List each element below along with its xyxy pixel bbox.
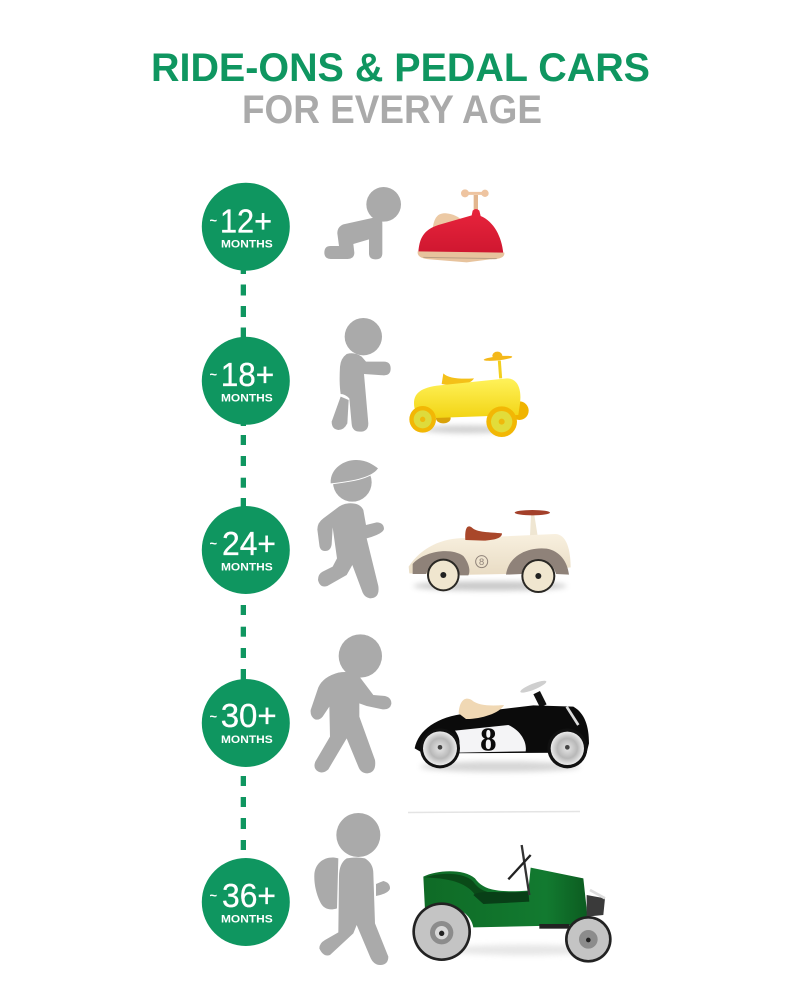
icon: child with backpack: [314, 813, 390, 965]
badge: 18+ months: ~: [210, 367, 218, 382]
badge: 30+ months: ~: [210, 709, 218, 724]
badge: 12+ months: [202, 183, 290, 271]
badge: 24+ months: MONTHS: [221, 562, 273, 574]
badge: 24+ months: ~: [210, 536, 218, 551]
badge: 24+ months: 24+: [222, 525, 276, 562]
dashed timeline connector: [241, 268, 246, 850]
badge: 24+ months: [202, 506, 290, 594]
car: black racer number 8: 8: [480, 722, 497, 759]
badge: 18+ months: 18+: [221, 356, 274, 393]
car: black racer number 8: [415, 679, 589, 772]
badge: 30+ months: 30+: [221, 697, 277, 734]
car: cream speedster: [409, 510, 571, 593]
car: green vintage pedal car: [412, 845, 612, 963]
row: 30+ months: [202, 634, 589, 773]
icon: walking child with cap: [317, 460, 384, 598]
row: 12+ months: [202, 183, 504, 271]
badge: 36+ months: [202, 858, 290, 946]
car: cream speedster: 8: [479, 557, 484, 567]
row: 36+ months: [202, 813, 612, 965]
row: 24+ months: [202, 460, 571, 598]
car: yellow ride-on: [409, 352, 529, 437]
badge: 18+ months: MONTHS: [221, 393, 273, 405]
subheading: for every age: FOR EVERY AGE: [242, 88, 542, 132]
title: [151, 46, 650, 132]
badge: 30+ months: [202, 679, 290, 767]
icon: crawling baby: [324, 187, 401, 259]
badge: 36+ months: ~: [210, 888, 218, 903]
icon: walking child: [311, 634, 391, 773]
badge: 12+ months: MONTHS: [221, 238, 273, 250]
row: 18+ months: [202, 318, 529, 437]
car: red wobble ride-on: [418, 189, 504, 262]
badge: 30+ months: MONTHS: [221, 734, 273, 746]
badge: 18+ months: [202, 337, 290, 425]
faint floor line: [408, 812, 580, 813]
icon: standing toddler: [332, 318, 391, 432]
badge: 36+ months: MONTHS: [221, 914, 273, 926]
badge: 12+ months: ~: [210, 213, 218, 228]
badge: 36+ months: 36+: [222, 877, 276, 914]
badge: 12+ months: 12+: [220, 203, 272, 240]
heading: ride-ons and pedal cars: RIDE-ONS & PEDAL CARS: [151, 46, 650, 90]
